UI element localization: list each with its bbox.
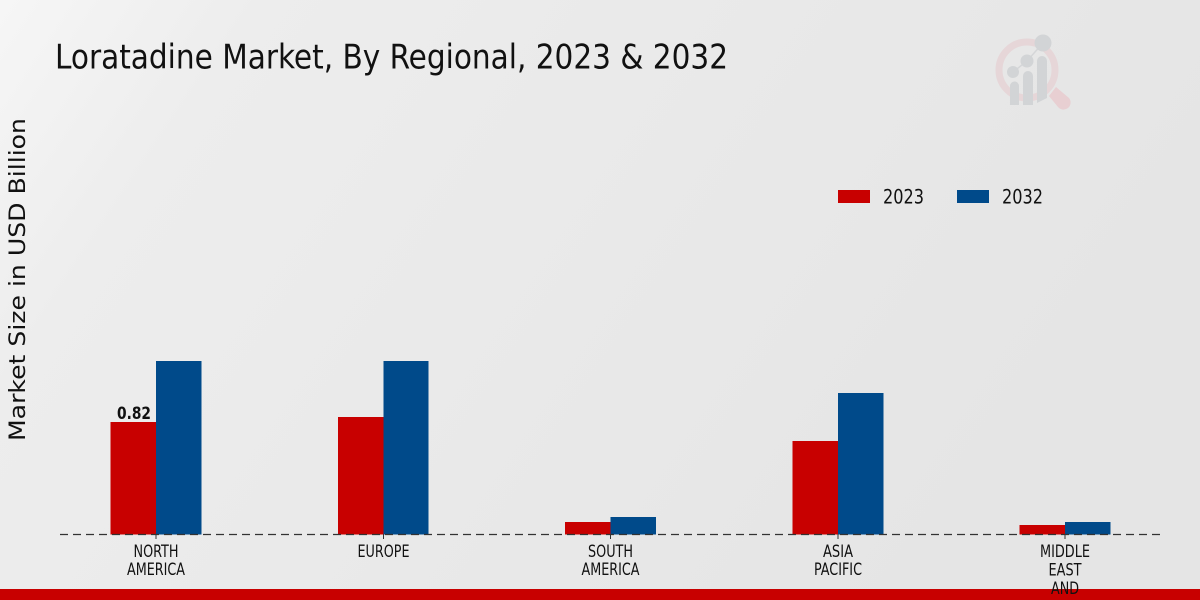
legend swatch 2032 [957,190,989,203]
legend label 2023: 2023 [883,186,924,208]
label America: AMERICA [127,560,186,579]
x-axis labels [127,542,1090,598]
legend label 2032: 2032 [1002,186,1043,208]
watermark logo icon [999,34,1071,110]
data label 0.82: 0.82 [117,404,151,424]
label North: NORTH [134,542,178,561]
y-axis label: Market Size in USD Billion [5,118,31,441]
bottom red band [0,589,1200,600]
bars: South America [565,517,656,534]
label Europe: EUROPE [358,542,410,561]
label East: EAST [1048,560,1082,580]
bars: Europe [338,361,428,534]
label South: SOUTH [588,542,633,561]
label Asia: ASIA [823,542,854,561]
label America (South): AMERICA [582,560,640,579]
legend swatch 2023 [838,190,870,203]
bars: Asia Pacific [792,393,884,534]
x-axis baseline [60,534,1160,536]
bars: North America [110,361,202,534]
bars: Middle East and Africa [1020,522,1110,534]
label And: AND [1051,579,1079,598]
label Pacific: PACIFIC [814,560,862,579]
label Middle: MIDDLE [1040,542,1090,561]
legend [838,186,1043,208]
title: Loratadine Market, By Regional, 2023 & 2032 [55,38,728,76]
